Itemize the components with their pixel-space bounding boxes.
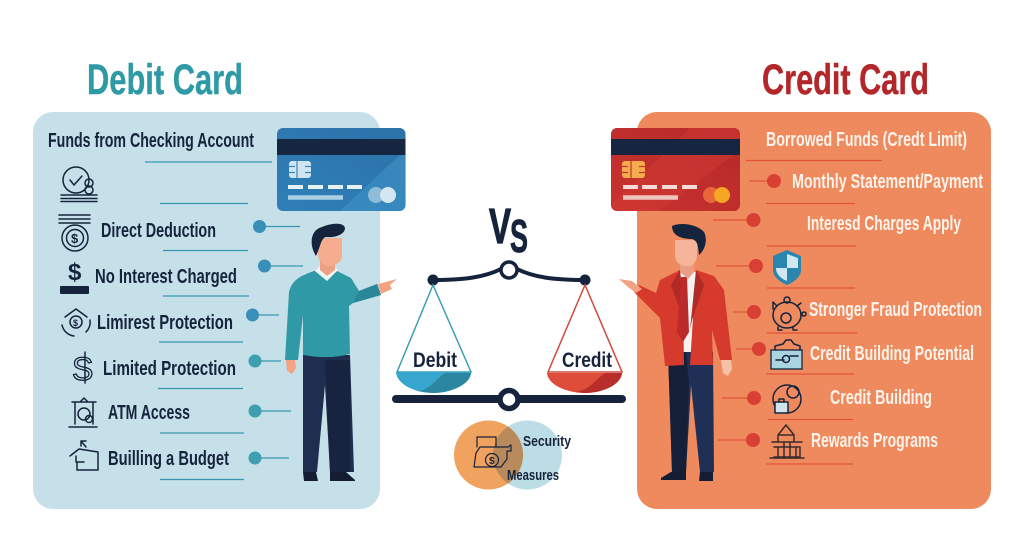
icon: shield cycle: $ — [73, 318, 78, 328]
text: limited protection: Limited Protection — [103, 358, 236, 380]
icon: piggy bank — [773, 297, 806, 330]
text: credit building: Credit Building — [830, 387, 932, 409]
panel background: credit — [637, 112, 991, 509]
panel: debit card — [33, 112, 406, 509]
blazer — [634, 270, 732, 366]
separator lines: debit — [145, 162, 272, 480]
label: Credit: Credit — [562, 349, 612, 372]
text: direct deduction: Direct Deduction — [101, 220, 216, 242]
text: Vs: V — [489, 200, 511, 254]
label: Measures: Measures — [507, 467, 559, 484]
connector dots: credit — [713, 174, 781, 447]
title: Debit Card: Debit Card — [87, 56, 243, 104]
trousers — [303, 355, 354, 472]
card: red — [611, 128, 740, 211]
icon: check and coin — [61, 167, 97, 202]
pointing hand — [619, 279, 642, 293]
hair — [312, 224, 345, 256]
trousers — [668, 352, 714, 472]
icon: coin and lock — [773, 385, 801, 413]
balance beam — [428, 262, 590, 286]
text: building a budget: Builling a Budget — [108, 448, 229, 470]
hand down — [721, 360, 732, 376]
credit pan — [547, 285, 622, 393]
icon: bank — [770, 425, 804, 458]
debit pan — [396, 285, 471, 393]
hand down — [286, 360, 296, 374]
text: limirest protection: Limirest Protection — [97, 312, 233, 334]
collar — [315, 266, 338, 281]
icon: budget house arrow — [70, 441, 98, 470]
scale base bar — [392, 390, 626, 408]
title: Credit Card: Credit Card — [762, 56, 929, 104]
connector dots: debit — [246, 220, 303, 464]
card number dashes — [623, 185, 697, 189]
panel: credit card — [611, 112, 991, 509]
icon: cash and card: $ — [489, 456, 495, 467]
figure: man in red blazer — [619, 224, 732, 481]
shoes — [303, 472, 355, 481]
text: funds from checking account: Funds from Checking Account — [48, 130, 254, 152]
text: ATM access: ATM Access — [108, 402, 190, 424]
neck and face — [680, 258, 694, 279]
neck and face — [320, 255, 335, 276]
text: rewards programs: Rewards Programs — [811, 430, 938, 452]
icon: large dollar outline: S — [72, 351, 93, 387]
icon: ATM — [69, 398, 97, 427]
icon: dollar on bar — [60, 259, 89, 294]
separator lines: credit — [746, 160, 882, 464]
card: blue — [277, 128, 406, 211]
hair — [672, 224, 706, 255]
shoes — [661, 472, 713, 481]
label: Security: Security — [523, 433, 572, 450]
icon: shield cycle — [62, 309, 90, 336]
centre: versus balance scale — [392, 200, 626, 490]
shirt — [674, 272, 704, 352]
chip — [622, 161, 645, 178]
card number dashes — [288, 185, 362, 189]
chip — [289, 161, 311, 178]
icon: coin stack — [59, 215, 90, 251]
panel background: debit — [33, 112, 380, 509]
icon: dollar on bar: $ — [68, 259, 82, 286]
icon: coin stack: $ — [71, 231, 79, 246]
icon: shield — [773, 250, 801, 285]
venn diagram: security measures — [454, 420, 572, 490]
tie — [677, 277, 689, 342]
figure: man in teal sweater — [285, 224, 397, 481]
text: no interest charged: No Interest Charged — [95, 266, 237, 288]
sweater — [285, 271, 381, 360]
pointing hand — [378, 279, 397, 294]
label: Debit: Debit — [413, 349, 457, 372]
icon: cash register — [771, 340, 802, 369]
text: Vs: S — [510, 210, 528, 262]
